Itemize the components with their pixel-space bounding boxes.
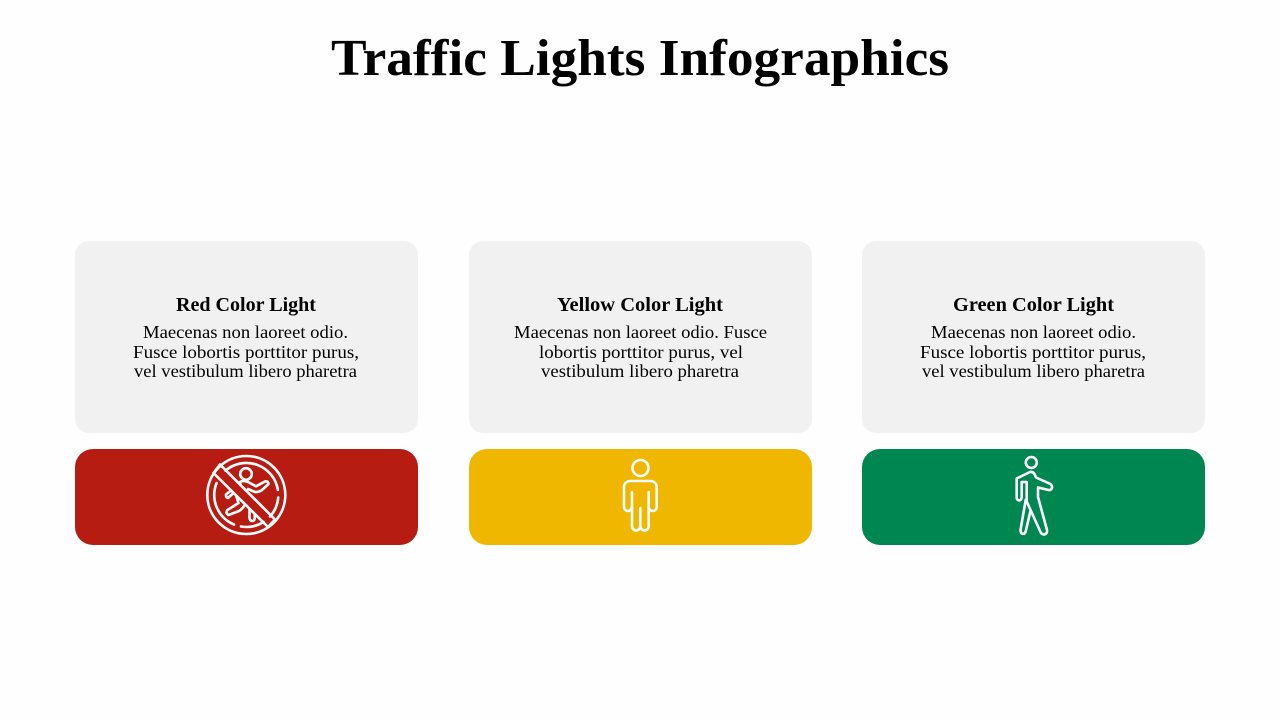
green body text (920, 322, 1146, 381)
green body text: vel vestibulum libero pharetra (922, 361, 1145, 381)
icon: no pedestrian (207, 456, 285, 534)
panel: yellow light (469, 241, 812, 545)
yellow heading: Yellow Color Light (557, 294, 723, 316)
panel: red light (75, 241, 418, 545)
title: Traffic Lights Infographics (331, 30, 949, 87)
yellow body text: lobortis porttitor purus, vel (539, 342, 743, 362)
red body text: Maecenas non laoreet odio. (143, 322, 348, 342)
red body text (133, 322, 359, 381)
icon: standing person (624, 460, 657, 530)
red body text: Fusce lobortis porttitor purus, (133, 342, 359, 362)
yellow body text: Maecenas non laoreet odio. Fusce (514, 322, 767, 342)
red body text: vel vestibulum libero pharetra (134, 361, 357, 381)
yellow text card (469, 241, 812, 433)
red text card (75, 241, 418, 433)
green heading: Green Color Light (953, 294, 1114, 316)
panel: green light (862, 241, 1205, 545)
icon: walking person (1017, 457, 1052, 534)
green body text: Fusce lobortis porttitor purus, (920, 342, 1146, 362)
green text card (862, 241, 1205, 433)
red icon bar (75, 449, 418, 545)
red heading: Red Color Light (176, 294, 316, 316)
green icon bar (862, 449, 1205, 545)
green body text: Maecenas non laoreet odio. (931, 322, 1136, 342)
yellow icon bar (469, 449, 812, 545)
yellow body text (514, 322, 767, 381)
yellow body text: vestibulum libero pharetra (541, 361, 739, 381)
